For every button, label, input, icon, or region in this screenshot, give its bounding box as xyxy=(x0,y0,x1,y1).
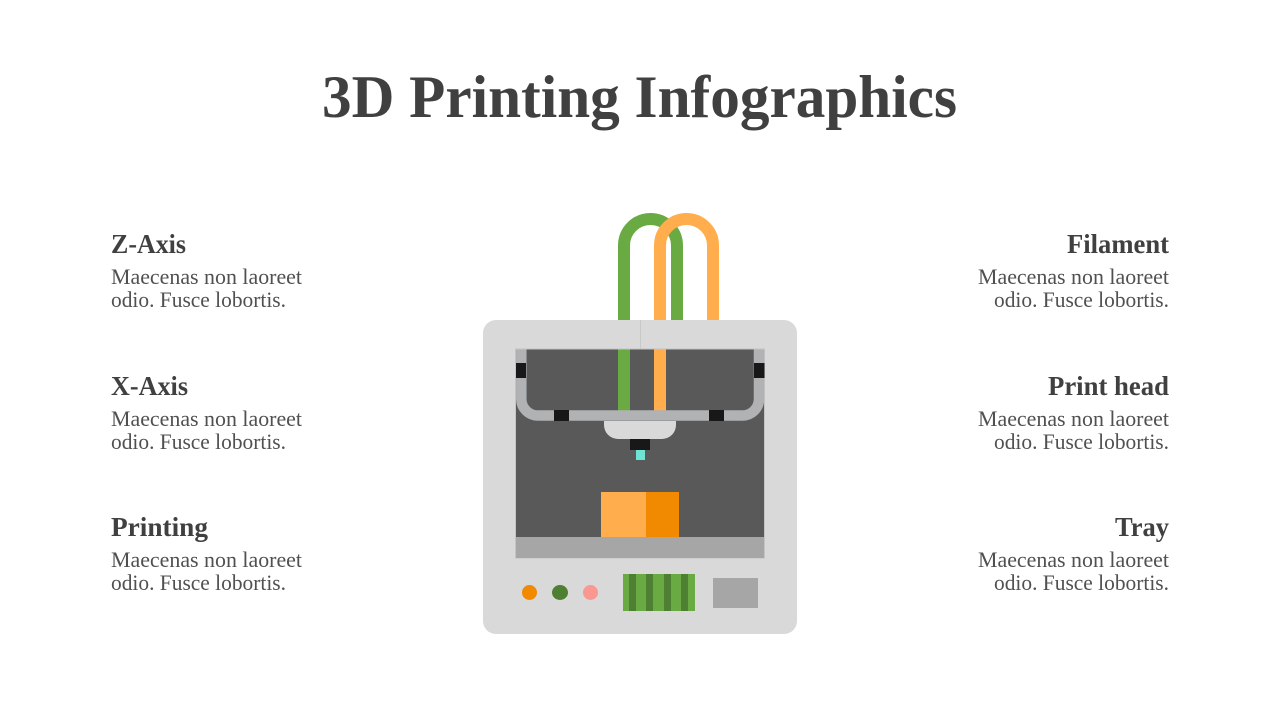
text block: Z-Axis: Maecenas non laoreet xyxy=(111,264,302,289)
text block: Filament: odio. Fusce lobortis. xyxy=(994,287,1169,312)
3D printer illustration xyxy=(483,219,797,634)
title: 3D Printing Infographics xyxy=(322,64,957,130)
text block: Filament: Maecenas non laoreet xyxy=(978,264,1169,289)
text block: Z-Axis: odio. Fusce lobortis. xyxy=(111,287,286,312)
text block: X-Axis: Maecenas non laoreet xyxy=(111,406,302,431)
text block: X-Axis: X-Axis xyxy=(111,371,188,401)
text block: Print head: odio. Fusce lobortis. xyxy=(994,429,1169,454)
filament inside chamber xyxy=(618,350,666,410)
display panel xyxy=(713,578,758,608)
text block: Tray: odio. Fusce lobortis. xyxy=(994,570,1169,595)
text block: Print head xyxy=(978,371,1169,454)
filament loops xyxy=(624,219,713,321)
printed object xyxy=(601,492,679,537)
printer body xyxy=(483,320,797,634)
text block: Tray: Maecenas non laoreet xyxy=(978,547,1169,572)
print chamber xyxy=(516,349,764,558)
tray xyxy=(516,537,764,558)
text block: Printing: odio. Fusce lobortis. xyxy=(111,570,286,595)
text block: Filament xyxy=(978,229,1169,312)
text block: Printing: Maecenas non laoreet xyxy=(111,547,302,572)
indicator lights xyxy=(522,585,598,600)
text block: X-Axis xyxy=(111,371,302,454)
text block: Tray: Tray xyxy=(1115,512,1169,542)
print head xyxy=(604,421,676,460)
text block: X-Axis: odio. Fusce lobortis. xyxy=(111,429,286,454)
text block: Tray xyxy=(978,512,1169,595)
text block: Printing xyxy=(111,512,302,595)
text block: Print head: Maecenas non laoreet xyxy=(978,406,1169,431)
vent grille xyxy=(623,574,695,611)
x-axis rail xyxy=(521,350,759,416)
text block: Z-Axis xyxy=(111,229,302,312)
rail clamps xyxy=(516,363,764,421)
text block: Print head: Print head xyxy=(1048,371,1169,401)
text block: Printing: Printing xyxy=(111,512,208,542)
text block: Filament: Filament xyxy=(1067,229,1169,259)
text block: Z-Axis: Z-Axis xyxy=(111,229,186,259)
